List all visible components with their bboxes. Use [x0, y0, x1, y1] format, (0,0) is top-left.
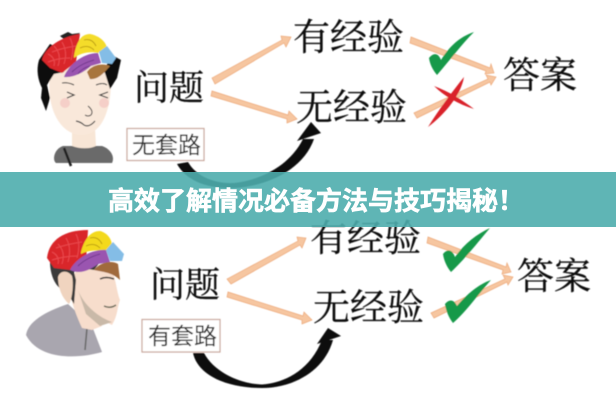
text: answer: 答案 [517, 256, 591, 298]
text: has experience: 有经验 [310, 218, 421, 260]
arrow: no experience to answer [431, 275, 513, 318]
panel: with method (bottom diagram) [26, 218, 591, 388]
arrow: black curve top [177, 122, 321, 188]
arrow: question to has experience [227, 237, 306, 284]
text: no experience: 无经验 [313, 287, 424, 329]
arrow: has experience to answer [410, 37, 494, 74]
arrow: has experience to answer [427, 237, 511, 274]
icon: red cross [428, 77, 474, 127]
text: question: 问题 [134, 69, 204, 108]
arrow: question to no experience [227, 292, 312, 324]
icon: green check 1 [443, 228, 490, 272]
arrow: no experience to answer [414, 75, 496, 118]
icon: green check [429, 32, 474, 75]
text: no experience: 无经验 [296, 87, 407, 129]
text: answer: 答案 [503, 55, 577, 97]
label box: no method: 无套路 [132, 132, 201, 158]
title text: 高效了解情况必备方法与技巧揭秘！ [108, 186, 524, 216]
text: question: 问题 [150, 266, 220, 305]
label box: with method: 有套路 [148, 323, 217, 349]
panel: no method (top diagram) [38, 17, 577, 188]
text: has experience: 有经验 [293, 17, 404, 59]
arrow: question to has experience [212, 36, 291, 84]
title banner [0, 172, 616, 227]
icon: green check 2 [445, 280, 491, 323]
icon: cartoon man with brain [38, 32, 121, 166]
arrow: question to no experience [211, 91, 297, 123]
icon: realistic man with brain [26, 230, 124, 356]
arrow: black curve bottom [193, 328, 341, 388]
